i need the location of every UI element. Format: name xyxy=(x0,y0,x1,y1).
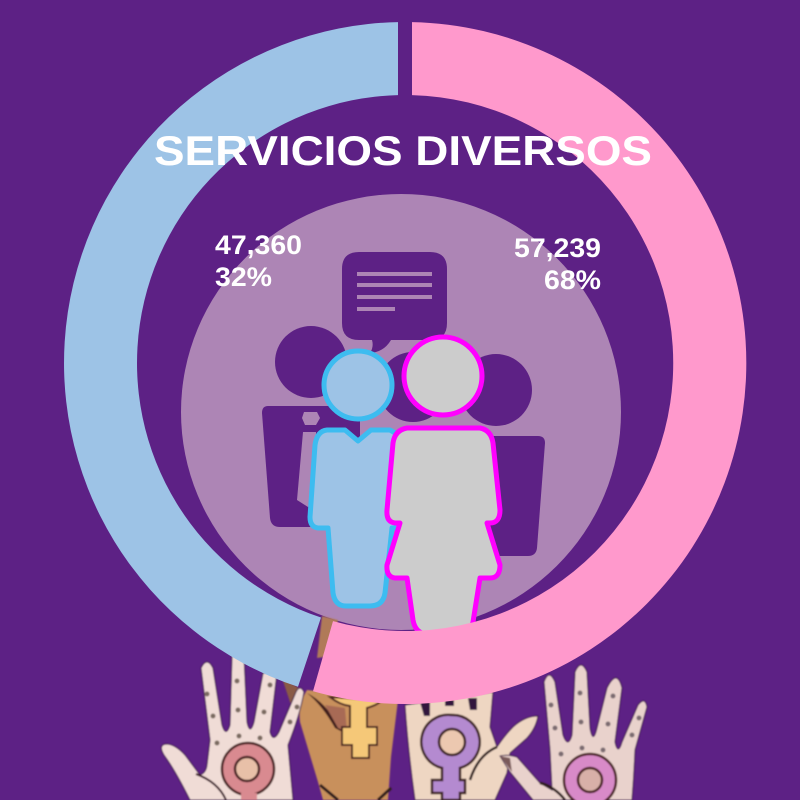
label: pink value: 57,239 xyxy=(514,233,601,263)
icon: female figure in pink outline xyxy=(387,337,500,634)
icon: male figure in blue xyxy=(310,351,408,606)
illustration: raised hands xyxy=(161,616,647,800)
palm dots xyxy=(204,678,300,746)
hand 1: left hand with rose symbol xyxy=(161,655,304,800)
donut segment: blue 32% xyxy=(64,22,398,687)
label: pink percent: 68% xyxy=(544,265,601,295)
label: blue value: 47,360 xyxy=(215,230,302,260)
label: blue percent: 32% xyxy=(215,262,272,292)
hand 2: brown hand with yellow symbol xyxy=(282,616,398,800)
title: SERVICIOS DIVERSOS xyxy=(154,127,652,174)
hand 4: right hand with pink symbol xyxy=(500,665,647,800)
icon: purple group of people xyxy=(262,326,545,556)
central light circle xyxy=(181,194,621,630)
donut segment: pink 68% xyxy=(313,22,746,704)
hand 3: centre hand with purple symbol xyxy=(405,692,538,800)
palm dots xyxy=(548,690,642,756)
icon: speech bubble xyxy=(342,252,447,353)
